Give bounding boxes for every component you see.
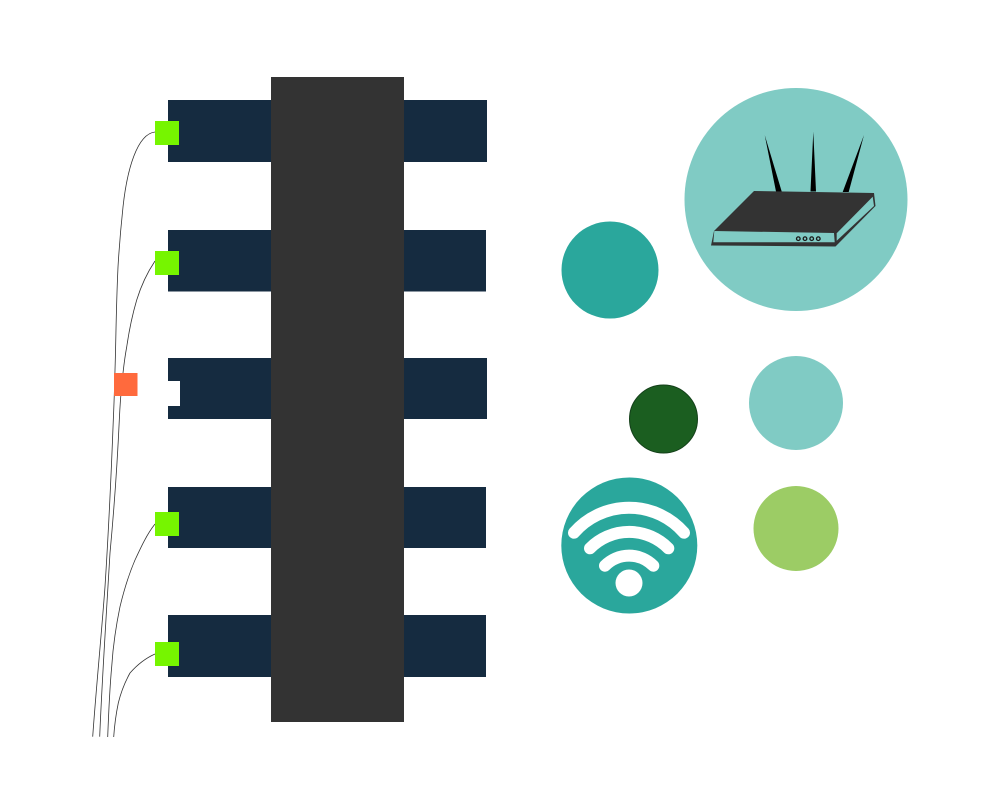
circle: teal — [562, 222, 658, 318]
slot bar 3 with empty port — [168, 358, 487, 419]
router front face — [713, 231, 835, 242]
panel: rack of network slots — [168, 77, 487, 722]
cables — [93, 132, 155, 737]
cable from port 5 — [114, 654, 155, 737]
connector: green port 2 — [155, 251, 179, 275]
slot bar 5 — [168, 615, 486, 677]
router badge — [684, 88, 908, 311]
circle: light green — [754, 486, 838, 571]
icon: router in circle — [684, 88, 908, 311]
slot bar 2 — [168, 230, 486, 292]
status lights — [796, 237, 820, 240]
icon: wifi in circle — [561, 478, 697, 614]
central column — [271, 77, 404, 722]
slot bar 1 — [168, 100, 487, 162]
antennas — [765, 132, 864, 192]
connector: green port 5 — [155, 642, 179, 666]
circle: pale teal — [749, 356, 843, 450]
connector: green port 1 — [155, 121, 179, 145]
cable from port 4 — [108, 524, 155, 737]
cable from port 2 — [100, 261, 155, 737]
wifi arcs — [574, 508, 684, 566]
wifi badge — [561, 478, 697, 614]
router body — [711, 191, 876, 246]
circle: dark green — [630, 385, 698, 453]
connector: green port 4 — [155, 512, 179, 536]
wifi dot — [616, 570, 642, 596]
slot bar 4 — [168, 487, 486, 548]
connector: orange unplugged — [114, 373, 138, 396]
cable from port 1 — [93, 132, 155, 737]
router side face — [837, 197, 874, 241]
